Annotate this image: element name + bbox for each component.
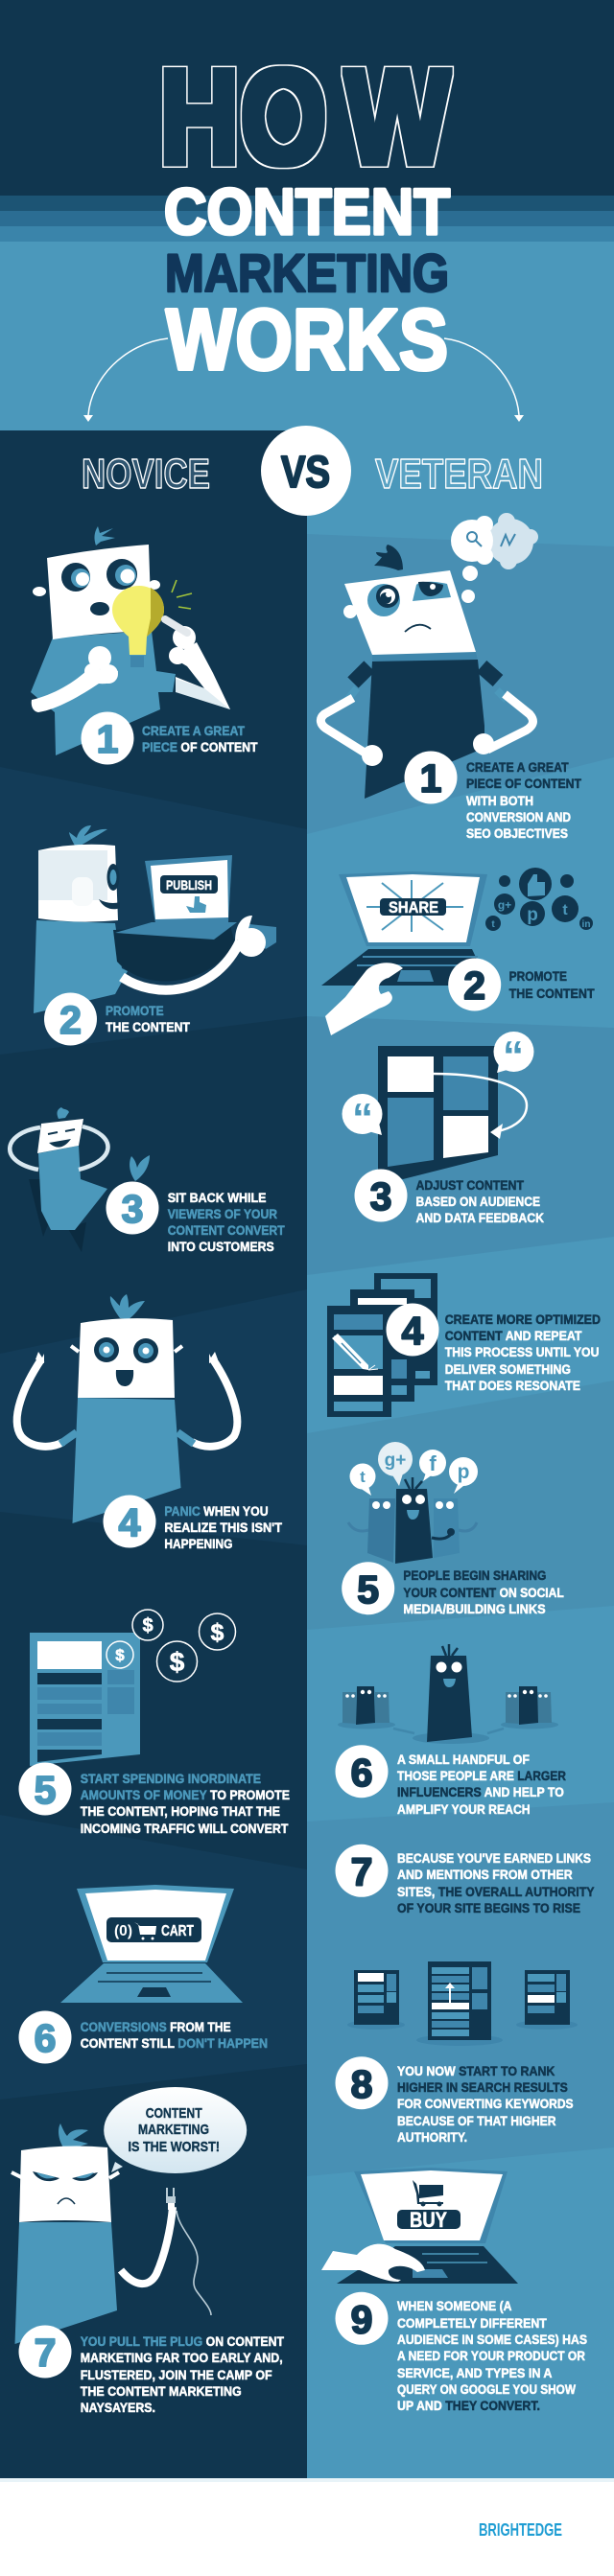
ranking pages bbox=[347, 1961, 578, 2046]
speech bubble: MARKETING bbox=[138, 2122, 209, 2138]
vs badge: VS bbox=[281, 447, 330, 497]
step text: SITES, THE OVERALL AUTHORITY bbox=[397, 1884, 595, 1899]
step text bbox=[397, 2063, 574, 2145]
social speech bubbles bbox=[349, 1442, 478, 1496]
title: HOW bbox=[159, 42, 449, 193]
number badge bbox=[336, 2292, 388, 2345]
step text: NAYSAYERS. bbox=[81, 2400, 155, 2415]
number badge bbox=[336, 1745, 388, 1798]
icon: pencil bbox=[332, 1334, 378, 1370]
number badge: 7 bbox=[35, 2331, 56, 2375]
step text: SIT BACK WHILE bbox=[168, 1190, 267, 1205]
step text: YOUR CONTENT ON SOCIAL bbox=[403, 1585, 564, 1600]
step text: OF YOUR SITE BEGINS TO RISE bbox=[397, 1900, 580, 1915]
number badge: 8 bbox=[351, 2062, 372, 2106]
step text bbox=[397, 1752, 566, 1817]
speech bubble: IS THE WORST! bbox=[129, 2139, 220, 2155]
veteran step 2 bbox=[321, 868, 595, 1035]
step text bbox=[106, 1003, 190, 1034]
step text: PIECE OF CONTENT bbox=[466, 776, 581, 791]
step text: BECAUSE OF THAT HIGHER bbox=[397, 2113, 556, 2128]
panicking character bbox=[17, 1294, 237, 1523]
icon: dollar coins: $ bbox=[142, 1615, 154, 1636]
number badge: 2 bbox=[59, 998, 82, 1042]
number badge bbox=[355, 1170, 407, 1221]
novice step 7 bbox=[12, 2087, 284, 2415]
social icons: t bbox=[491, 919, 495, 930]
thinking character bbox=[320, 545, 532, 799]
step text: QUERY ON GOOGLE YOU SHOW bbox=[397, 2381, 577, 2397]
social icons: t bbox=[562, 902, 568, 918]
veteran step 4 bbox=[327, 1273, 601, 1417]
step text: WHEN SOMEONE (A bbox=[397, 2298, 512, 2313]
veteran step 1 bbox=[320, 513, 581, 841]
veteran step 8 bbox=[336, 1961, 578, 2145]
number badge bbox=[19, 2011, 71, 2063]
cart button bbox=[106, 1917, 201, 1942]
number badge bbox=[336, 2056, 388, 2109]
step text: CONTENT STILL DON'T HAPPEN bbox=[81, 2035, 268, 2051]
step text bbox=[403, 1567, 564, 1616]
step text bbox=[81, 2333, 284, 2415]
number badge: 5 bbox=[357, 1567, 379, 1612]
step text: AUTHORITY. bbox=[397, 2129, 467, 2145]
number badge bbox=[405, 752, 457, 803]
social speech bubbles: t bbox=[360, 1468, 366, 1486]
number badge bbox=[386, 1304, 439, 1356]
step text: THE CONTENT MARKETING bbox=[81, 2383, 242, 2399]
number badge: 3 bbox=[370, 1174, 391, 1218]
icon: dollar coins bbox=[106, 1610, 236, 1682]
step text: VIEWERS OF YOUR bbox=[168, 1206, 277, 1221]
step text: REALIZE THIS ISN'T bbox=[164, 1520, 282, 1535]
step text: FOR CONVERTING KEYWORDS bbox=[397, 2096, 574, 2111]
step text: PROMOTE bbox=[106, 1003, 164, 1018]
header background bbox=[0, 0, 614, 431]
number badge: 4 bbox=[119, 1500, 141, 1544]
number badge: 6 bbox=[35, 2016, 56, 2060]
number badge: 7 bbox=[351, 1850, 372, 1894]
title bbox=[83, 42, 524, 422]
character at laptop bbox=[34, 825, 237, 1013]
number badge: 3 bbox=[122, 1187, 143, 1231]
quote bubbles bbox=[342, 1032, 533, 1142]
icon: dollar coins: $ bbox=[170, 1647, 185, 1677]
laptop with share button bbox=[321, 871, 489, 986]
step text: ADJUST CONTENT bbox=[416, 1177, 524, 1193]
footer: BRIGHTEDGE bbox=[479, 2520, 562, 2540]
step text: HIGHER IN SEARCH RESULTS bbox=[397, 2079, 568, 2095]
heading: novice: NOVICE bbox=[82, 451, 210, 498]
social speech bubbles: f bbox=[429, 1451, 437, 1475]
number badge bbox=[106, 1181, 159, 1235]
number badge: 5 bbox=[35, 1768, 56, 1812]
step text: PANIC WHEN YOU bbox=[164, 1503, 269, 1519]
step text: HAPPENING bbox=[164, 1536, 232, 1551]
step text: AND DATA FEEDBACK bbox=[416, 1210, 544, 1225]
web page with ads bbox=[30, 1633, 140, 1766]
panel: novice column bbox=[0, 430, 307, 2478]
laptop with cart bbox=[60, 1885, 243, 2003]
veteran step 3 bbox=[342, 1032, 544, 1225]
novice step 6 bbox=[19, 1885, 268, 2063]
number badge: 1 bbox=[97, 717, 118, 761]
step text: CONTENT CONVERT bbox=[168, 1222, 285, 1238]
title: MARKETING bbox=[165, 243, 449, 303]
people group bbox=[348, 1477, 477, 1564]
title: WORKS bbox=[166, 292, 448, 388]
icon: shopping cart bbox=[413, 2180, 443, 2207]
step text: MEDIA/BUILDING LINKS bbox=[403, 1601, 546, 1616]
relaxing character bbox=[10, 1107, 150, 1252]
number badge: 2 bbox=[463, 963, 485, 1008]
social icons: g+ bbox=[498, 898, 511, 912]
step text: PROMOTE bbox=[509, 968, 567, 984]
arm and hand bbox=[122, 916, 276, 990]
footer bbox=[0, 2478, 614, 2576]
step text: COMPLETELY DIFFERENT bbox=[397, 2315, 547, 2331]
step text: MARKETING FAR TOO EARLY AND, bbox=[81, 2350, 283, 2365]
step text: WITH BOTH bbox=[466, 793, 533, 808]
step text: SERVICE, AND TYPES IN A bbox=[397, 2365, 553, 2380]
cart button: CART bbox=[161, 1923, 194, 1939]
step text: AND MENTIONS FROM OTHER bbox=[397, 1867, 573, 1882]
speech bubble: CONTENT bbox=[146, 2105, 202, 2122]
novice step 1 bbox=[31, 526, 258, 765]
cart button: (0) bbox=[114, 1923, 132, 1939]
number badge: 6 bbox=[351, 1751, 372, 1795]
step text: THE CONTENT, HOPING THAT THE bbox=[81, 1803, 280, 1819]
step text bbox=[81, 1771, 290, 1836]
step text: INFLUENCERS AND HELP TO bbox=[397, 1784, 564, 1799]
angry character bbox=[12, 2123, 173, 2344]
step text bbox=[466, 759, 581, 841]
number badge bbox=[44, 993, 97, 1045]
step text: PIECE OF CONTENT bbox=[142, 739, 258, 754]
number badge: 9 bbox=[351, 2297, 372, 2341]
step text: PEOPLE BEGIN SHARING bbox=[403, 1567, 546, 1583]
social icons: p bbox=[527, 905, 538, 925]
step text: A SMALL HANDFUL OF bbox=[397, 1752, 530, 1767]
veteran step 7 bbox=[336, 1845, 595, 1915]
arrow bbox=[434, 1074, 527, 1139]
hand on trackpad bbox=[325, 963, 403, 1035]
social speech bubbles: g+ bbox=[385, 1450, 406, 1471]
thought bubble bbox=[451, 513, 538, 581]
quote bubbles: “ bbox=[503, 1033, 524, 1079]
step text: BASED ON AUDIENCE bbox=[416, 1194, 540, 1209]
stacked pages bbox=[327, 1273, 437, 1417]
number badge bbox=[19, 2326, 71, 2378]
title: CONTENT bbox=[164, 175, 450, 248]
step text bbox=[509, 968, 595, 1001]
page layout bbox=[378, 1046, 498, 1179]
buy button: BUY bbox=[410, 2208, 447, 2232]
step text: AMOUNTS OF MONEY TO PROMOTE bbox=[81, 1787, 290, 1802]
step text: AMPLIFY YOUR REACH bbox=[397, 1801, 531, 1817]
step text: THE CONTENT bbox=[106, 1019, 190, 1034]
step text: FLUSTERED, JOIN THE CAMP OF bbox=[81, 2367, 272, 2382]
publish button bbox=[160, 875, 218, 913]
vs badge bbox=[261, 426, 351, 516]
novice step 3 bbox=[10, 1107, 285, 1254]
heading: veteran: VETERAN bbox=[375, 451, 543, 498]
number badge: 1 bbox=[420, 756, 441, 801]
number badge bbox=[336, 1845, 388, 1897]
step text: DELIVER SOMETHING bbox=[445, 1361, 571, 1377]
number badge bbox=[104, 1496, 155, 1547]
novice step 5 bbox=[19, 1610, 290, 1836]
step text: YOU PULL THE PLUG ON CONTENT bbox=[81, 2333, 284, 2349]
social icons: in bbox=[582, 919, 590, 930]
step text bbox=[164, 1503, 282, 1551]
veteran step 6 bbox=[336, 1644, 566, 1817]
step text bbox=[168, 1190, 285, 1254]
step text: INTO CUSTOMERS bbox=[168, 1239, 274, 1254]
step text: THE CONTENT bbox=[509, 986, 595, 1001]
icon: dollar coins: $ bbox=[211, 1619, 224, 1646]
quote bubbles: “ bbox=[352, 1095, 373, 1142]
step text: INCOMING TRAFFIC WILL CONVERT bbox=[81, 1821, 289, 1836]
step text: THAT DOES RESONATE bbox=[445, 1378, 580, 1393]
step text bbox=[397, 2298, 587, 2413]
step text: CONVERSIONS FROM THE bbox=[81, 2019, 231, 2034]
veteran step 9 bbox=[321, 2168, 587, 2413]
step text bbox=[81, 2019, 268, 2051]
number badge bbox=[342, 1562, 394, 1614]
number badge bbox=[448, 959, 501, 1010]
character with lightbulb bbox=[31, 526, 230, 755]
step text bbox=[142, 723, 258, 754]
step text: CREATE A GREAT bbox=[466, 759, 569, 775]
number badge bbox=[19, 1762, 71, 1816]
social speech bubbles: p bbox=[458, 1461, 469, 1483]
plug and cord bbox=[166, 2188, 211, 2315]
social icons bbox=[485, 868, 593, 931]
step text bbox=[445, 1311, 601, 1393]
novice step 2 bbox=[34, 825, 276, 1045]
number badge: 4 bbox=[402, 1309, 424, 1353]
step text: SEO OBJECTIVES bbox=[466, 825, 568, 841]
step text: START SPENDING INORDINATE bbox=[81, 1771, 261, 1786]
number badge bbox=[81, 711, 134, 765]
publish button: PUBLISH bbox=[166, 877, 212, 893]
influencer figures bbox=[338, 1644, 558, 1744]
step text: A NEED FOR YOUR PRODUCT OR bbox=[397, 2348, 585, 2363]
icon: dollar coins: $ bbox=[115, 1646, 125, 1664]
step text bbox=[416, 1177, 544, 1225]
step text: CONVERSION AND bbox=[466, 809, 571, 824]
panel: veteran column bbox=[307, 430, 614, 2478]
step text bbox=[397, 1850, 595, 1915]
veteran step 5 bbox=[342, 1442, 564, 1616]
hand on trackpad bbox=[321, 2244, 425, 2282]
step text: CONTENT AND REPEAT bbox=[445, 1328, 582, 1343]
speech bubble bbox=[104, 2087, 247, 2173]
step text: THOSE PEOPLE ARE LARGER bbox=[397, 1768, 566, 1783]
step text: AUDIENCE IN SOME CASES) HAS bbox=[397, 2332, 587, 2347]
step text: YOU NOW START TO RANK bbox=[397, 2063, 555, 2078]
novice step 4 bbox=[17, 1294, 282, 1551]
laptop with buy button bbox=[337, 2168, 518, 2284]
step text: CREATE A GREAT bbox=[142, 723, 245, 738]
step text: UP AND THEY CONVERT. bbox=[397, 2398, 540, 2413]
laptop with share button: SHARE bbox=[389, 898, 438, 917]
